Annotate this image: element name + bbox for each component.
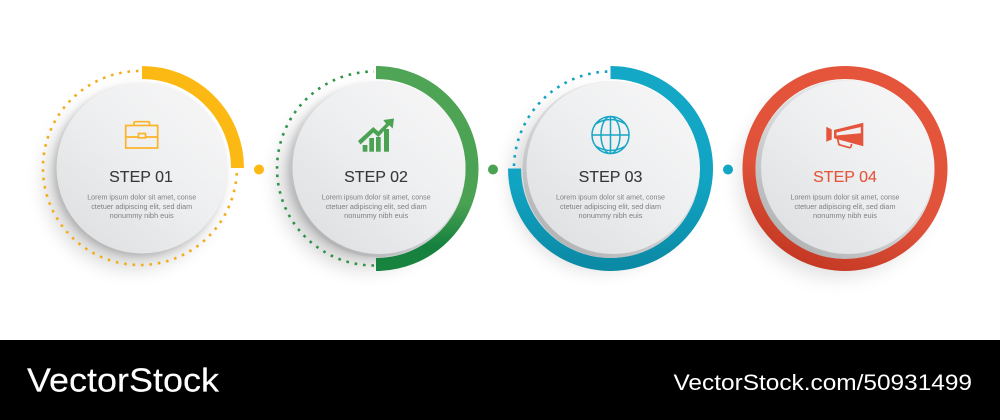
body text: nonummy nibh euis [578, 211, 643, 220]
footer bar [0, 340, 1000, 420]
progress arc: quarter yellow [142, 72, 238, 168]
panel: step 02 [277, 72, 472, 268]
progress arc: three quarters blue [514, 72, 706, 264]
progress arc: half green [376, 72, 472, 264]
body text: Lorem ipsum dolor sit amet, conse [322, 192, 431, 202]
disc shadow [279, 85, 460, 268]
icon: megaphone [826, 123, 863, 148]
heading: STEP 01 [109, 169, 173, 186]
body text: ctetuer adipiscing elit, sed diam [794, 202, 896, 211]
dotted track [277, 72, 374, 266]
body text: nonummy nibh euis [344, 211, 409, 220]
body text: nonummy nibh euis [813, 211, 877, 220]
icon: briefcase [126, 122, 158, 148]
footer logo: VectorStock [27, 362, 219, 400]
disc rim [522, 81, 700, 258]
icon: globe [592, 116, 629, 154]
body text: Lorem ipsum dolor sit amet, conse [556, 192, 665, 202]
icon: rising chart [358, 118, 394, 152]
body text: Lorem ipsum dolor sit amet, conse [87, 192, 196, 202]
body text: ctetuer adipiscing elit, sed diam [91, 202, 192, 211]
connector dot blue [723, 164, 733, 174]
body text: ctetuer adipiscing elit, sed diam [326, 202, 427, 211]
body text: ctetuer adipiscing elit, sed diam [560, 202, 661, 211]
heading: STEP 03 [579, 169, 642, 186]
disc [761, 81, 934, 254]
connector dot green [488, 164, 498, 174]
full ring red [749, 72, 941, 264]
body text [556, 192, 665, 220]
heading: STEP 02 [344, 169, 408, 186]
disc [56, 82, 228, 254]
ring shadow [740, 85, 932, 277]
heading: STEP 04 [813, 169, 877, 186]
disc [292, 81, 466, 254]
footer id: VectorStock.com/50931499 [674, 370, 972, 395]
dotted track [43, 71, 237, 265]
body text [87, 192, 196, 220]
panel: step 04 [740, 72, 941, 277]
disc shadow [46, 86, 224, 267]
disc shadow [513, 94, 687, 268]
disc rim [290, 82, 466, 257]
body text [790, 192, 900, 220]
body text [322, 192, 431, 220]
panel: step 03 [513, 72, 706, 268]
dotted track [514, 72, 608, 166]
body text: nonummy nibh euis [110, 211, 174, 220]
disc [526, 81, 700, 254]
connector dot yellow [254, 164, 264, 174]
disc rim [756, 80, 934, 259]
body text: Lorem ipsum dolor sit amet, conse [790, 192, 900, 202]
panel: step 01 [43, 71, 238, 267]
